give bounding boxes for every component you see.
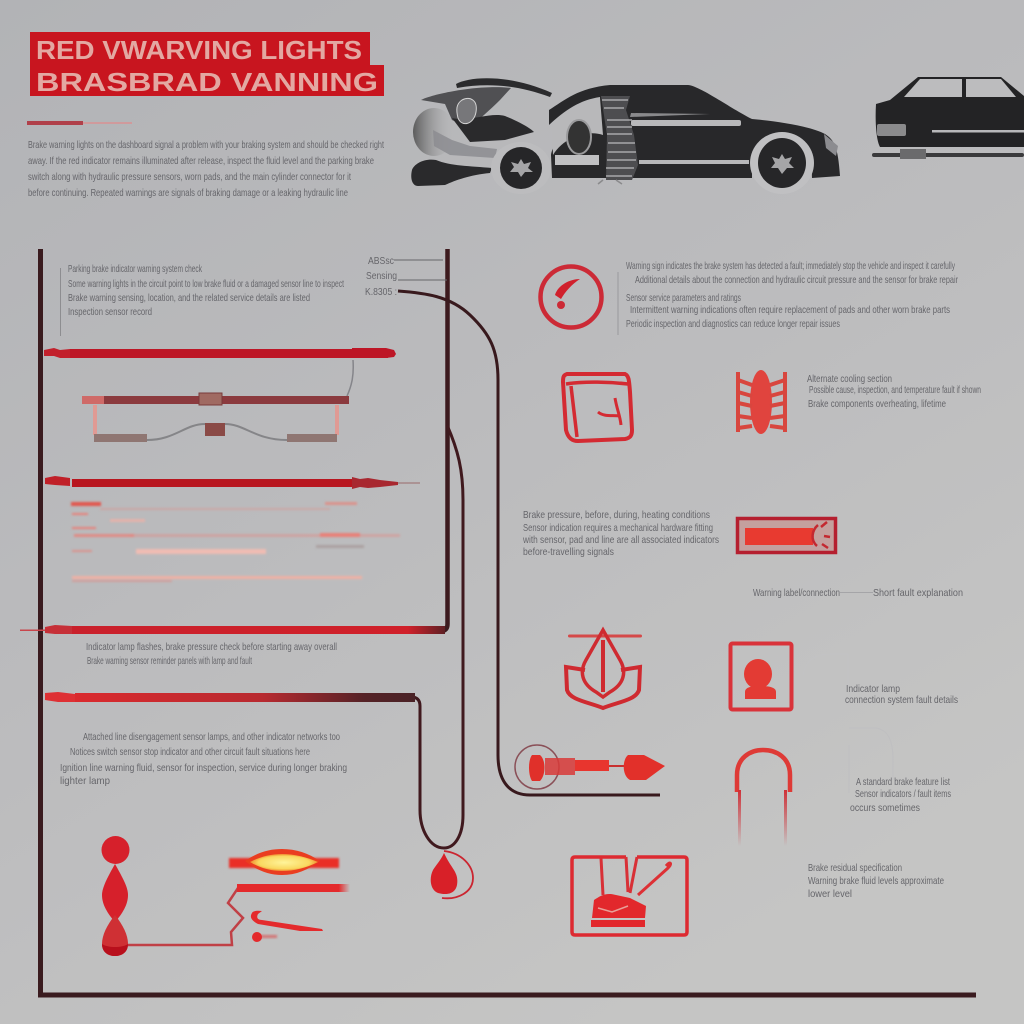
text: center description: Brake pressure, before, during, heating conditions — [523, 509, 710, 521]
text under bar three: Indicator lamp flashes, brake pressure check before starting away overall — [86, 641, 337, 653]
text: brake tool description: Warning brake fluid levels approximate — [808, 875, 944, 887]
text: brake tool description — [808, 862, 944, 900]
wire: label K to connector — [398, 291, 660, 795]
text: brake tool description: lower level — [808, 888, 852, 900]
callout labels with leaders: ABSsc — [368, 255, 394, 267]
caption row with leader: Short fault explanation — [873, 587, 963, 599]
text: portrait description: Indicator lamp — [846, 683, 900, 695]
red bar four — [45, 692, 415, 702]
text under bar three — [86, 641, 337, 667]
red bar two with glowing light streaks — [45, 476, 420, 582]
icon: circular gauge warning — [540, 266, 602, 328]
text: top right explanation: Sensor service parameters and ratings — [626, 292, 741, 304]
title underline accent — [27, 121, 132, 125]
text: upper left block — [60, 263, 344, 336]
text: arch description: A standard brake feature list — [856, 776, 950, 788]
text: radiator description: Brake components overheating, lifetime — [808, 398, 946, 410]
text: upper left block: Brake warning sensing, location, and the related service details are listed — [68, 292, 310, 304]
title banner — [30, 32, 384, 97]
icon: flame emblem — [566, 630, 642, 708]
illustration: main car cutaway — [411, 78, 840, 194]
icon: brake tool box — [572, 857, 687, 935]
text under bar four: Ignition line warning fluid, sensor for inspection, service during longer braking — [60, 762, 347, 774]
red bar one — [44, 348, 396, 358]
icon: droplet with ring — [431, 851, 473, 898]
text: top right explanation — [618, 260, 958, 335]
text: arch description: Sensor indicators / fault items — [855, 788, 951, 800]
text: center description: with sensor, pad and line are all associated indicators — [522, 534, 719, 546]
text: portrait description: connection system fault details — [845, 694, 958, 706]
text: portrait description — [803, 654, 958, 706]
text: top right explanation: Periodic inspection and diagnostics can reduce longer repair issues — [626, 318, 840, 330]
icon: stacked beads and wire — [102, 836, 350, 956]
text under bar four: Notices switch sensor stop indicator and other circuit fault situations here — [70, 746, 310, 758]
text: center description — [522, 509, 719, 558]
icon: hook and dot — [251, 911, 323, 942]
icon: square warning panel — [563, 374, 632, 441]
text under bar four: Attached line disengagement sensor lamps, and other indicator networks too — [83, 731, 340, 743]
component: brake rail and sensor wiring — [82, 360, 353, 442]
text: radiator description — [807, 373, 981, 410]
callout labels with leaders — [365, 255, 447, 298]
caption row with leader — [753, 587, 963, 599]
text: upper left block: Parking brake indicator warning system check — [68, 263, 202, 275]
text: center description: Sensor indication requires a mechanical hardware fitting — [523, 522, 713, 534]
icon: glowing warning lamp — [229, 849, 339, 875]
text: radiator description: Alternate cooling section — [807, 373, 892, 385]
icon: portrait warning frame — [730, 644, 792, 710]
text: upper left block: Some warning lights in the circuit point to low brake fluid or a damaged sensor line to inspect — [68, 278, 344, 290]
intro paragraph — [28, 139, 384, 199]
text: brake tool description: Brake residual specification — [808, 862, 902, 874]
icon: horizontal gauge bar — [738, 518, 836, 552]
title banner: BRASBRAD VANNING — [36, 67, 378, 97]
icon: red arch — [737, 750, 790, 846]
illustration: second car — [872, 77, 1024, 159]
text: upper left block: Inspection sensor record — [68, 306, 152, 318]
text: center description: before-travelling signals — [523, 546, 614, 558]
intro paragraph: away. If the red indicator remains illuminated after release, inspect the fluid level and the parking brake — [28, 155, 374, 167]
text under bar four: lighter lamp — [60, 775, 110, 787]
icon: connector plug — [515, 745, 665, 789]
text under bar four — [60, 731, 347, 787]
title banner: RED VWARVING LIGHTS — [36, 35, 362, 65]
intro paragraph: switch along with hydraulic pressure sensors, worn pads, and the main cylinder connector for it — [28, 171, 351, 183]
frame: inner vertical — [430, 249, 448, 631]
caption row with leader: Warning label/connection — [753, 587, 840, 599]
callout labels with leaders: K.8305 : — [365, 286, 397, 298]
wire: U loop to droplet — [400, 425, 463, 848]
text under bar three: Brake warning sensor reminder panels with lamp and fault — [87, 655, 252, 667]
intro paragraph: before continuing. Repeated warnings are signals of braking damage or a leaking hydraulic line — [28, 187, 348, 199]
frame: left vertical and bottom rule — [40, 249, 976, 995]
text: arch description — [849, 728, 951, 814]
icon: ribbed radiator — [738, 370, 785, 434]
red bar three — [20, 625, 445, 634]
callout labels with leaders: Sensing — [366, 270, 397, 282]
text: arch description: occurs sometimes — [850, 802, 920, 814]
intro paragraph: Brake warning lights on the dashboard signal a problem with your braking system and should be checked right — [28, 139, 384, 151]
